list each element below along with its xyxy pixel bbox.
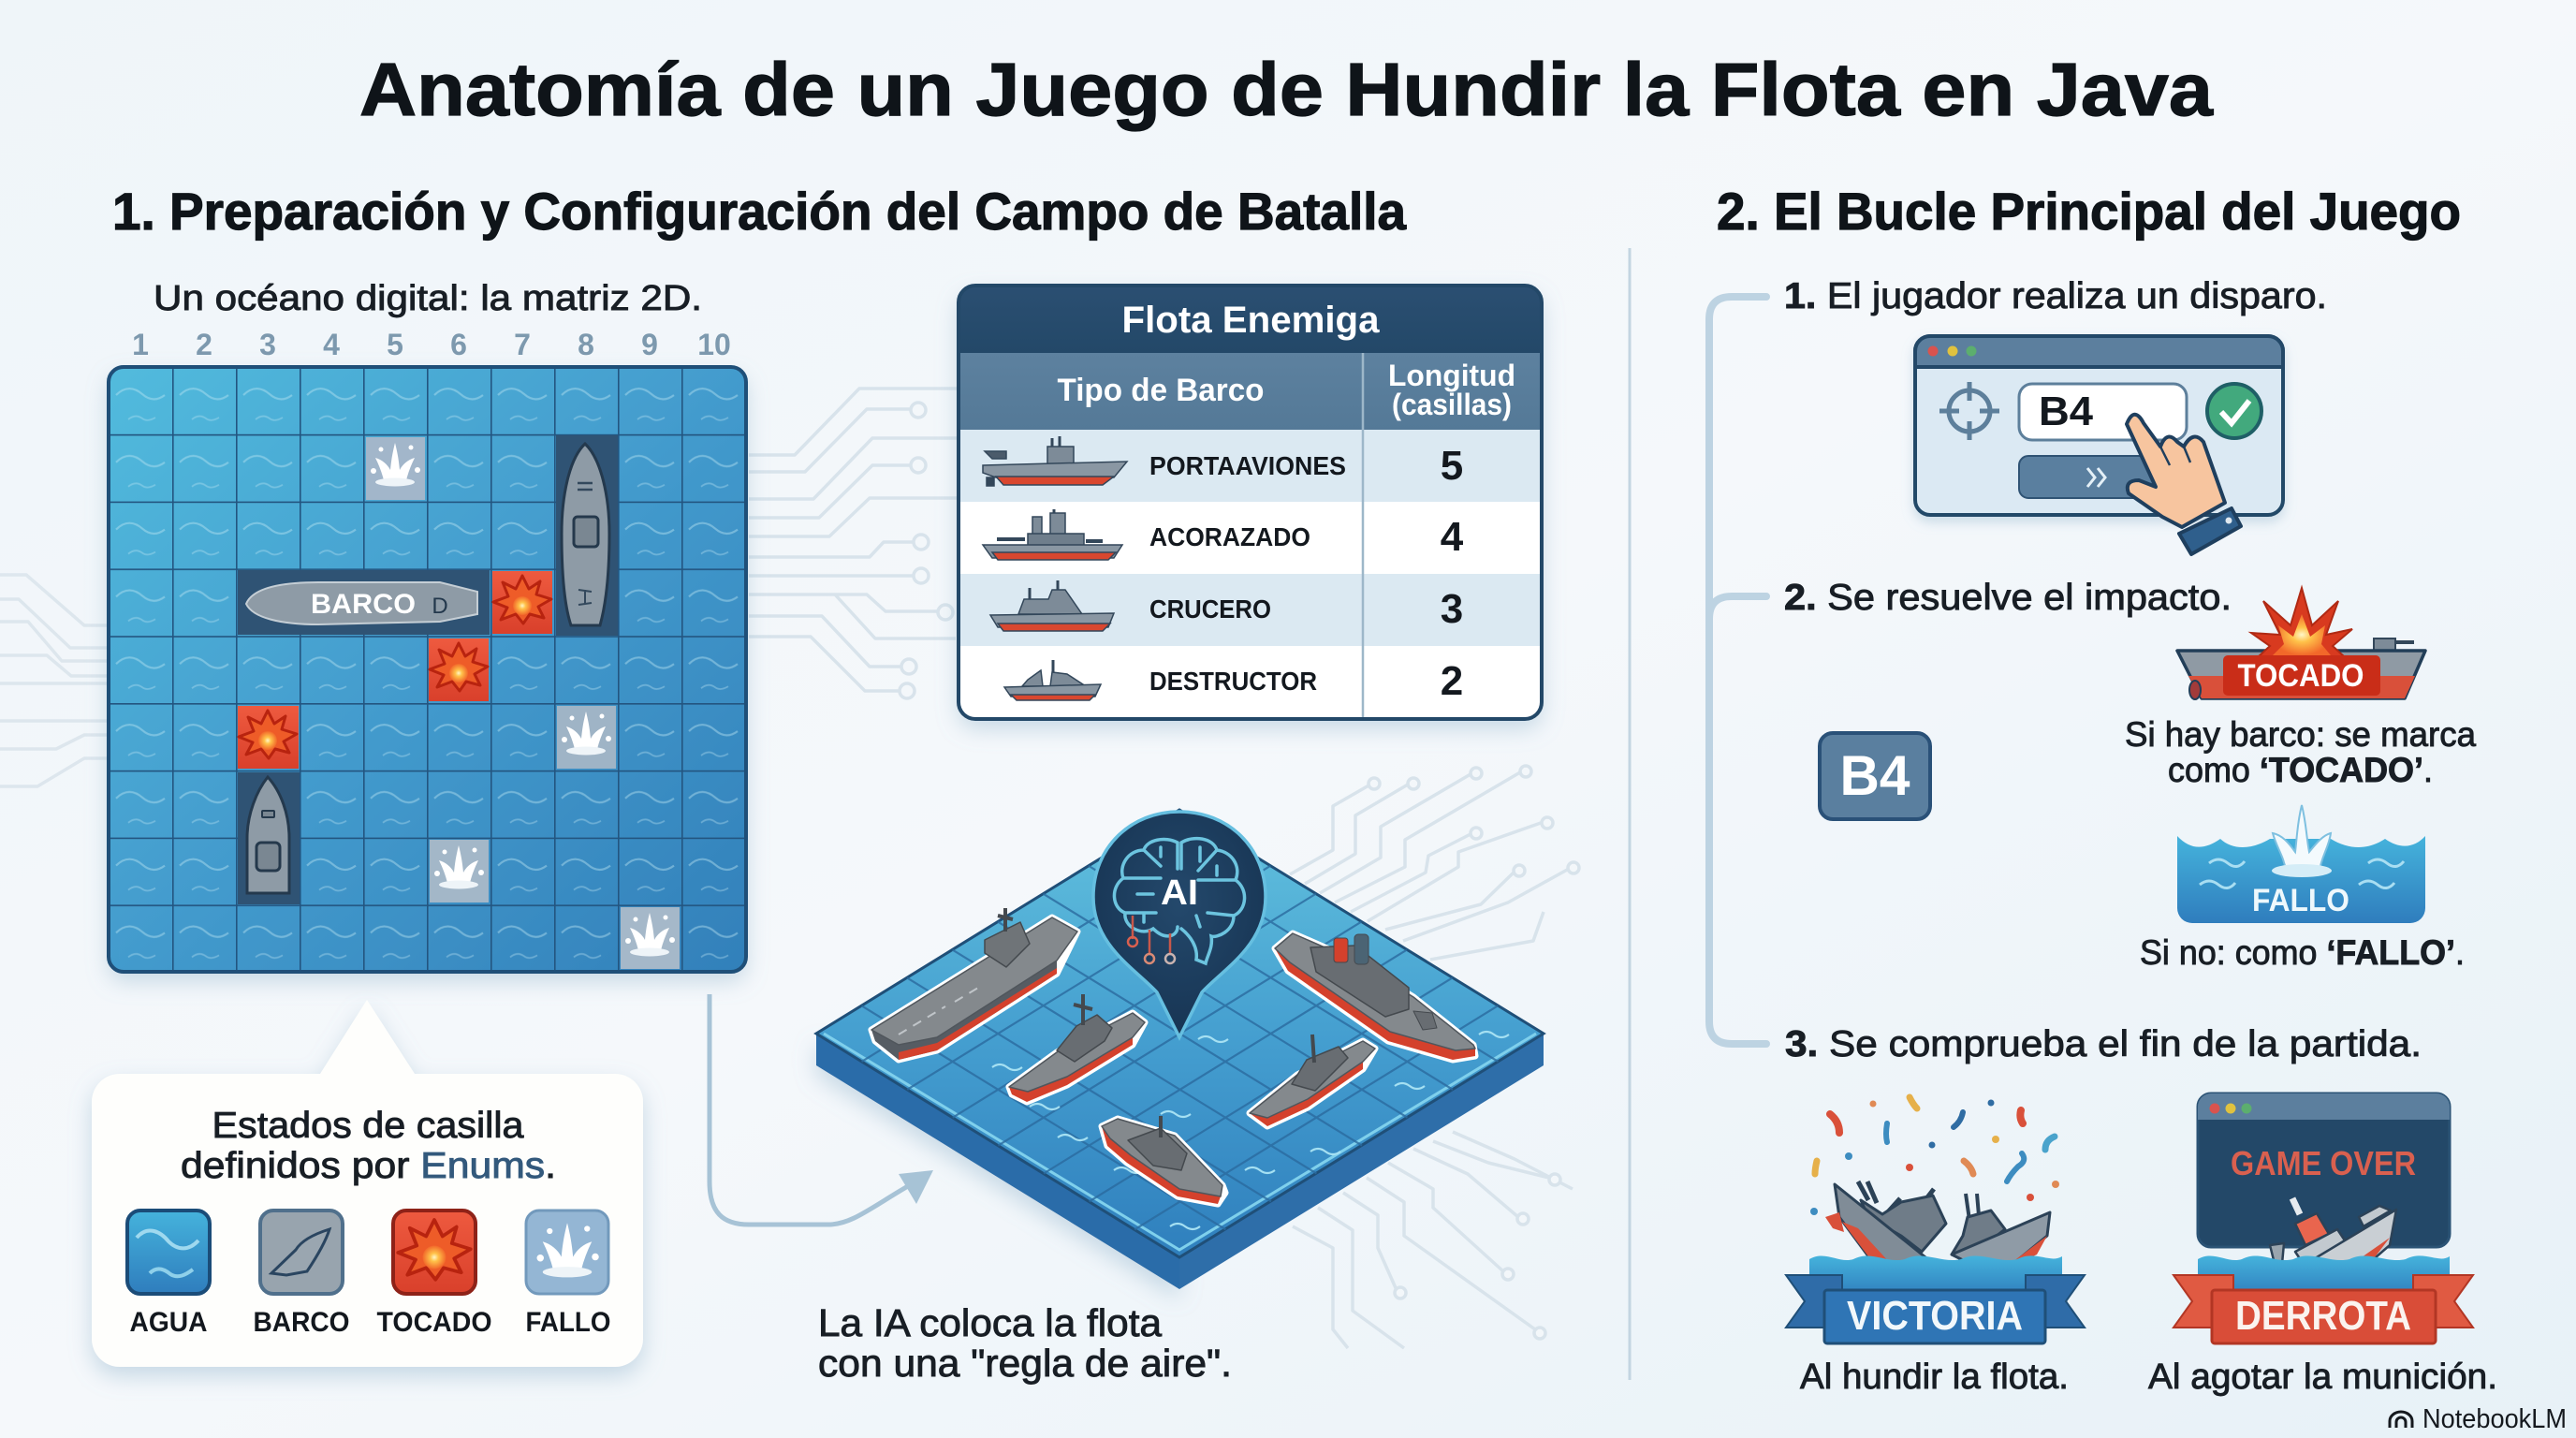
- icon: barco: [260, 1211, 343, 1294]
- icon: battleship: [983, 509, 1122, 560]
- legend labels: BARCO: [253, 1307, 350, 1338]
- icon: tocado: [393, 1211, 476, 1294]
- ship: battleship: [1275, 933, 1475, 1060]
- game over window: GAME OVER: [2231, 1144, 2416, 1182]
- row: portaaviones: [983, 436, 1463, 489]
- caption: AI placement: con una "regla de aire".: [818, 1342, 1232, 1385]
- ship: carrier: [871, 908, 1077, 1060]
- column numbers: 1: [132, 328, 149, 361]
- icon: check: [2207, 384, 2261, 438]
- illustration: ship hit: [2177, 588, 2425, 699]
- step 1 heading: 1. El jugador realiza un disparo.: [1784, 276, 2327, 316]
- text: hit explanation: Si hay barco: se marca: [2125, 715, 2476, 754]
- illustration: ship hit: TOCADO: [2237, 658, 2364, 694]
- illustration: defeat: [2174, 1093, 2473, 1343]
- legend labels: [129, 1307, 610, 1338]
- row: portaaviones: 5: [1441, 443, 1463, 489]
- header: length: (casillas): [1392, 388, 1512, 421]
- column numbers: 9: [641, 328, 658, 361]
- cell: miss R8: [621, 907, 680, 969]
- text: defeat condition: Al agotar la munición.: [2148, 1357, 2497, 1397]
- icon: sinking ship: [2270, 1198, 2396, 1266]
- legend labels: FALLO: [526, 1307, 610, 1338]
- column numbers: 6: [450, 328, 467, 361]
- cell: miss R5: [557, 706, 616, 769]
- header: length: [1388, 359, 1515, 421]
- caption: AI placement: La IA coloca la flota: [818, 1301, 1162, 1344]
- legend text: [181, 1106, 556, 1186]
- ship: horizontal BARCO: BARCO: [311, 589, 416, 620]
- table title: Flota Enemiga: [1121, 300, 1380, 341]
- illustration: victory: [1786, 1097, 2085, 1343]
- button: [2019, 456, 2167, 498]
- icon: aircraft carrier: [983, 436, 1127, 486]
- ship: horizontal BARCO: D: [432, 594, 448, 619]
- heading: section 1: 1. Preparación y Configuración del Campo de Batalla: [112, 182, 1407, 241]
- column numbers: 5: [387, 328, 403, 361]
- caption: AI placement: [818, 1301, 1232, 1385]
- icon: destroyer: [1004, 660, 1101, 700]
- AI pin with brain: AI: [1161, 873, 1198, 913]
- bracket: loop steps: [1709, 297, 1766, 1044]
- icon: confetti: [1810, 1097, 2059, 1215]
- row: destructor: DESTRUCTOR: [1149, 667, 1317, 696]
- subheading: matrix: Un océano digital: la matriz 2D.: [154, 279, 702, 318]
- row: acorazado: 4: [1441, 514, 1464, 560]
- row: crucero: 3: [1441, 586, 1463, 632]
- ship: horizontal BARCO: [238, 570, 490, 635]
- game over window: [2198, 1093, 2450, 1247]
- arrow: board to AI placement: [710, 994, 933, 1225]
- illustration: shot input window: [1915, 336, 2283, 554]
- cell: miss R7: [430, 840, 489, 902]
- ribbon: VICTORIA: [1847, 1293, 2023, 1339]
- ribbon: DERROTA: [2235, 1293, 2411, 1339]
- ship: vertical long: [556, 435, 618, 636]
- ship: bottom small: [1102, 1116, 1225, 1204]
- icon: sinking ship pieces: [1825, 1181, 2050, 1264]
- ship: left frigate: [1009, 994, 1145, 1102]
- header: ship type: Tipo de Barco: [1058, 373, 1264, 408]
- column numbers: 8: [578, 328, 594, 361]
- step 2 heading: 2. Se resuelve el impacto.: [1784, 578, 2232, 618]
- badge: B4: B4: [1840, 744, 1910, 807]
- row: acorazado: ACORAZADO: [1149, 522, 1310, 551]
- game board grid: [109, 367, 746, 972]
- row: acorazado: [983, 509, 1464, 560]
- legend text: Estados de casilla: [212, 1106, 524, 1146]
- column numbers: 4: [323, 328, 340, 361]
- row: crucero: [990, 580, 1463, 632]
- text: hit explanation: como ‘TOCADO’.: [2168, 751, 2433, 789]
- cell: miss R1: [366, 437, 425, 500]
- icon: crosshair: [1939, 382, 1999, 440]
- text: miss explanation: Si no: como ‘FALLO’.: [2140, 933, 2465, 972]
- column numbers: 10: [697, 328, 731, 361]
- legend text: definidos por Enums .: [181, 1146, 556, 1186]
- panel: cell states legend: [92, 1000, 643, 1367]
- heading: section 2: 2. El Bucle Principal del Juego: [1717, 182, 2461, 241]
- icon: cruiser: [990, 580, 1114, 631]
- column numbers: 2: [196, 328, 212, 361]
- legend labels: AGUA: [129, 1307, 208, 1338]
- header: length: Longitud: [1388, 359, 1515, 392]
- badge: B4: [1820, 733, 1930, 819]
- text: victory condition: Al hundir la flota.: [1800, 1357, 2069, 1397]
- panel: enemy fleet table: [959, 286, 1542, 719]
- text: hit explanation: [2125, 715, 2476, 789]
- icon: agua: [127, 1211, 210, 1294]
- column numbers: 7: [514, 328, 531, 361]
- row: destructor: 2: [1441, 658, 1463, 704]
- legend labels: TOCADO: [376, 1307, 492, 1338]
- ship: right frigate: [1250, 1034, 1375, 1126]
- row: destructor: [1004, 658, 1463, 704]
- input field: B4: [2039, 389, 2094, 434]
- cell: hit C2: [238, 706, 299, 769]
- column numbers: 3: [259, 328, 276, 361]
- ribbon: [2174, 1275, 2473, 1343]
- row: crucero: CRUCERO: [1149, 594, 1271, 624]
- illustration: water miss: [2177, 805, 2425, 923]
- NotebookLM logo: NotebookLM: [2422, 1404, 2567, 1434]
- isometric AI board: [816, 810, 1544, 1289]
- column numbers: [132, 328, 731, 361]
- step 3 heading: 3. Se comprueba el fin de la partida.: [1785, 1024, 2422, 1064]
- AI pin with brain: [1093, 812, 1266, 1037]
- input field: [2019, 384, 2187, 440]
- cell: hit C6: [492, 571, 552, 634]
- icon: fallo: [526, 1211, 608, 1294]
- icon: hand: [2127, 415, 2241, 554]
- ribbon: [1786, 1275, 2085, 1343]
- ship: vertical short: [238, 772, 300, 904]
- row: portaaviones: PORTAAVIONES: [1149, 451, 1346, 480]
- title: Anatomía de un Juego de Hundir la Flota en Java: [359, 48, 2214, 131]
- cell: hit C5: [429, 638, 489, 701]
- illustration: water miss: FALLO: [2252, 883, 2349, 918]
